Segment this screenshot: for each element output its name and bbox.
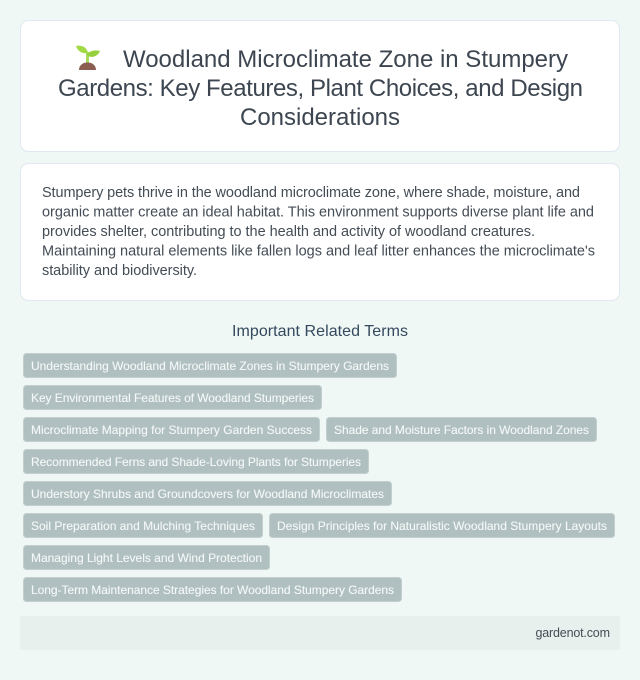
description paragraph: Maintaining natural elements like fallen logs and leaf litter enhances the microclimate's — [42, 244, 595, 260]
description paragraph: Stumpery pets thrive in the woodland microclimate zone, where shade, moisture, and — [42, 185, 580, 201]
tag: microclimate mapping — [24, 418, 320, 442]
footer source text: gardenot.com — [536, 626, 610, 640]
tag: recommended ferns — [24, 450, 368, 474]
tag: environmental features: Key Environmental Features of Woodland Stumperies — [31, 391, 314, 405]
tag: environmental features — [24, 386, 322, 410]
title text: Woodland Microclimate Zone in Stumpery — [123, 46, 568, 73]
tag: design principles: Design Principles for Naturalistic Woodland Stumpery Layouts — [277, 519, 607, 533]
heading: important related terms: Important Related Terms — [232, 323, 408, 340]
tag: light and wind — [24, 546, 270, 570]
panel: title card — [20, 20, 620, 152]
tag: soil preparation — [24, 514, 262, 538]
tag list — [24, 354, 614, 602]
tag: shade and moisture: Shade and Moisture Factors in Woodland Zones — [334, 423, 589, 437]
title text: Gardens: Key Features, Plant Choices, and Design — [58, 75, 583, 102]
description paragraph: organic matter create an ideal habitat. This environment supports diverse plant life and — [42, 204, 594, 220]
description paragraph: provides shelter, contributing to the health and activity of woodland creatures. — [42, 224, 535, 240]
tag: light and wind: Managing Light Levels and Wind Protection — [31, 551, 262, 565]
tag: shade and moisture — [326, 418, 596, 442]
tag: soil preparation: Soil Preparation and Mulching Techniques — [31, 519, 255, 533]
tag: understory shrubs — [24, 482, 392, 506]
icon: seedling — [76, 46, 100, 70]
tag: understanding zones — [24, 354, 396, 378]
tag: maintenance — [24, 578, 402, 602]
panel: description card — [20, 164, 620, 300]
description paragraph: stability and biodiversity. — [42, 263, 197, 279]
tag: recommended ferns: Recommended Ferns and Shade-Loving Plants for Stumperies — [31, 455, 361, 469]
footer bar — [20, 616, 620, 650]
tag: understanding zones: Understanding Woodland Microclimate Zones in Stumpery Gardens — [31, 359, 389, 373]
tag: maintenance: Long-Term Maintenance Strategies for Woodland Stumpery Gardens — [31, 583, 394, 597]
tag: design principles — [270, 514, 614, 538]
title text: Considerations — [240, 104, 400, 131]
description paragraph — [42, 185, 595, 279]
tag: microclimate mapping: Microclimate Mapping for Stumpery Garden Success — [31, 423, 312, 437]
tag: understory shrubs: Understory Shrubs and Groundcovers for Woodland Microclimates — [31, 487, 384, 501]
title text — [58, 46, 583, 131]
